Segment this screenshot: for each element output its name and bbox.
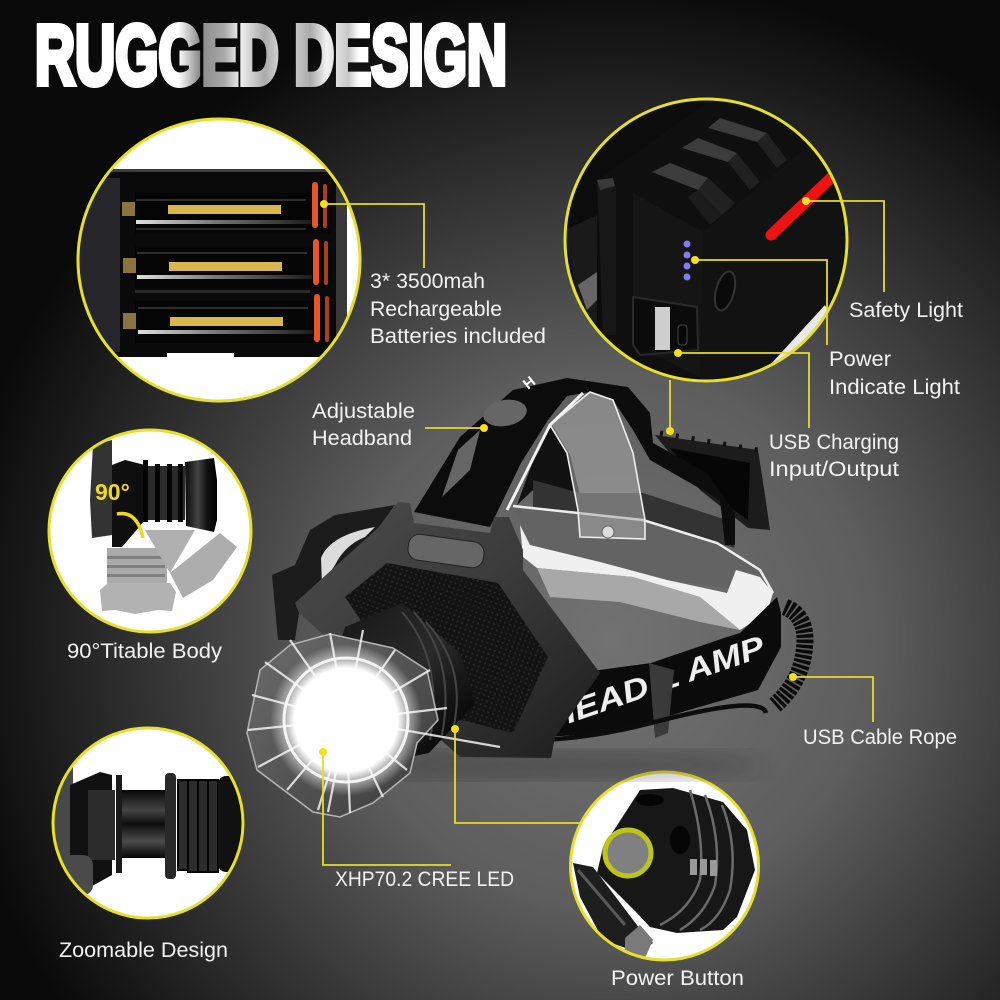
strap logo: H xyxy=(520,373,539,393)
lamp neck xyxy=(300,603,475,780)
panel: tilt body xyxy=(49,430,251,632)
button xyxy=(605,830,651,876)
arrow xyxy=(117,514,143,538)
label: adjustable headband xyxy=(312,400,415,450)
lamp head xyxy=(185,458,217,532)
pill xyxy=(407,533,485,569)
ribs xyxy=(660,790,733,930)
leader: safety light xyxy=(802,197,884,292)
lamp head xyxy=(247,634,438,817)
textured plate xyxy=(345,563,548,733)
battery 3 xyxy=(123,294,330,343)
label: batteries xyxy=(370,270,546,348)
lower cable xyxy=(437,705,766,741)
label: usb charging: Input/Output xyxy=(769,458,899,481)
label: usb charging: USB Charging xyxy=(769,431,899,454)
leader: power indicator xyxy=(691,256,827,345)
leader: batteries xyxy=(320,200,424,268)
left strap xyxy=(272,505,395,640)
panel: battery compartment xyxy=(70,119,360,401)
clear piece left arc xyxy=(507,393,583,510)
battery 2 xyxy=(123,239,330,293)
label: power indicate light: Indicate Light xyxy=(829,376,960,399)
leader: usb cable xyxy=(789,673,873,722)
panel: zoomable xyxy=(50,728,248,918)
ring rim xyxy=(513,506,773,593)
leader: headband xyxy=(425,424,488,432)
label: adjustable headband: Headband xyxy=(312,427,412,450)
label: power button: Power Button xyxy=(611,967,744,990)
panel: battery pack controls xyxy=(565,99,850,385)
coiled cable xyxy=(775,607,805,705)
device ribs xyxy=(652,118,787,225)
glow xyxy=(270,644,422,796)
label: tilt: 90°Titable Body xyxy=(67,640,223,663)
white ring band xyxy=(520,525,773,630)
title: RUGGED DESIGN xyxy=(35,8,507,102)
panel: power button xyxy=(570,772,758,960)
leader: led xyxy=(319,748,451,865)
ring reflection xyxy=(537,568,740,630)
label: adjustable headband: Adjustable xyxy=(312,400,415,423)
strap clip xyxy=(649,663,674,738)
ghost lamp positions xyxy=(100,530,237,614)
label: power indicate light: Power xyxy=(829,348,891,371)
strap lettering: HEAD L AMP xyxy=(544,629,769,736)
label: usb cable: USB Cable Rope xyxy=(803,726,957,749)
zoom barrel xyxy=(122,790,166,858)
label: batteries: 3* 3500mah xyxy=(370,270,485,293)
clear ring interior xyxy=(513,506,772,593)
strap patterns xyxy=(442,396,529,497)
light rays xyxy=(248,630,500,813)
headlamp xyxy=(247,373,805,817)
battery pack xyxy=(655,433,770,530)
leader: battery pack xyxy=(666,380,674,435)
leader: usb port xyxy=(674,349,809,428)
floor shadow xyxy=(360,751,760,779)
rear strap xyxy=(544,597,781,737)
safety light xyxy=(771,174,835,235)
lamp barrel xyxy=(148,466,185,520)
button housing xyxy=(597,788,755,933)
zoom ribs xyxy=(178,780,218,872)
lamp block xyxy=(112,460,145,547)
mesh pad xyxy=(533,480,735,548)
indicator lights xyxy=(684,240,690,280)
90 degree label: 90° xyxy=(95,479,130,505)
top strap xyxy=(414,378,735,545)
usb ports xyxy=(633,297,698,355)
label: batteries: Batteries included xyxy=(370,325,546,348)
label: zoomable: Zoomable Design xyxy=(59,939,228,962)
head plate xyxy=(90,440,112,538)
clear forehead piece xyxy=(550,392,645,539)
label: power indicate light xyxy=(829,348,960,399)
leader: power button xyxy=(451,725,580,823)
battery 1 xyxy=(122,182,330,234)
label: batteries: Rechargeable xyxy=(370,298,502,321)
white reflection xyxy=(772,305,826,364)
label: usb charging xyxy=(769,431,899,481)
y bracket xyxy=(295,502,600,758)
inner cavity xyxy=(517,425,580,505)
label: led: XHP70.2 CREE LED xyxy=(335,868,514,891)
screw xyxy=(602,526,614,538)
device body xyxy=(597,103,850,385)
label: safety light: Safety Light xyxy=(849,299,963,322)
side button xyxy=(714,270,736,312)
